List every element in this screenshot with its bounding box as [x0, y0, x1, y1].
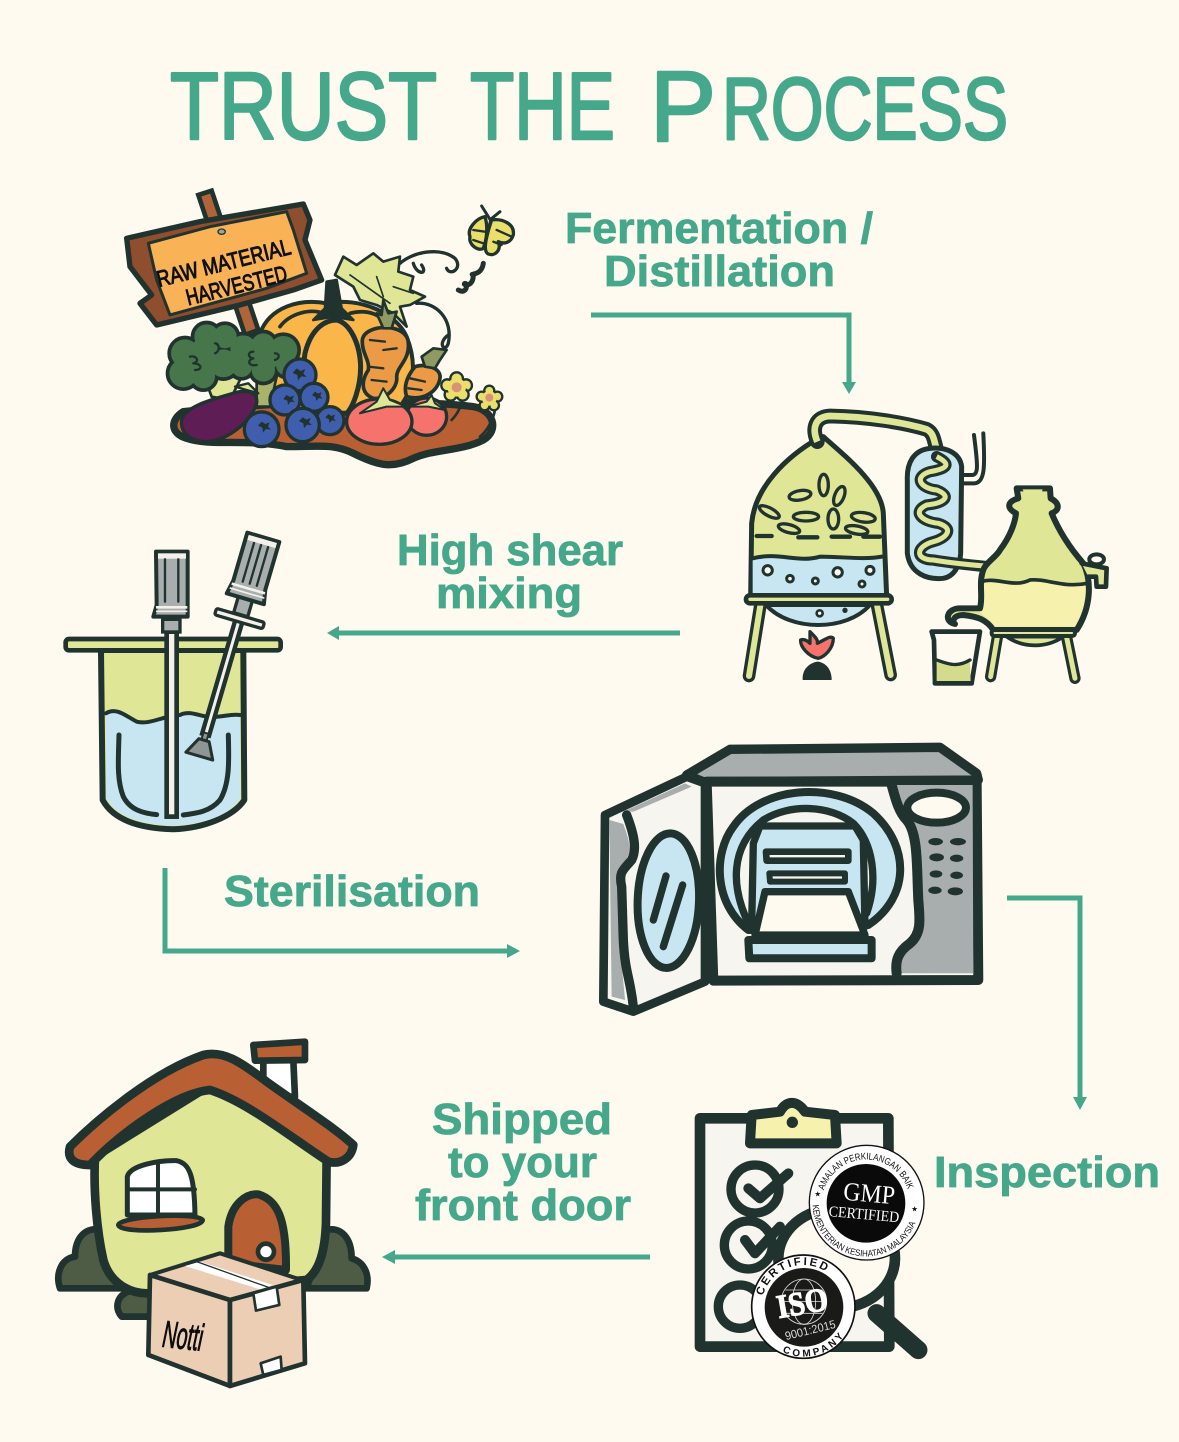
- label: fermentation / distillation: Distillation: [604, 247, 835, 296]
- roof: [69, 1054, 353, 1165]
- butterfly: [469, 206, 513, 255]
- broccoli: [168, 323, 299, 407]
- ground: [174, 402, 493, 465]
- door: [228, 1194, 286, 1270]
- illustration: distillation apparatus: [746, 416, 1107, 683]
- badge: GMP: GMP: [842, 1177, 896, 1210]
- checks: [718, 1165, 788, 1328]
- badge: GMP: ★: [814, 1190, 821, 1199]
- title: P: [650, 51, 716, 163]
- label: high shear mixing: mixing: [436, 569, 582, 618]
- sign face: [148, 212, 307, 315]
- eggplant: [182, 383, 258, 442]
- carrots: [362, 300, 447, 398]
- badge: ISO: 9001:2015: [784, 1318, 837, 1343]
- angled mixer: [175, 530, 287, 763]
- label: high shear mixing: [397, 526, 623, 618]
- label: high shear mixing: High shear: [397, 526, 623, 575]
- pumpkin: [256, 280, 413, 413]
- chamber ring: [720, 792, 900, 930]
- vertical mixer: [153, 552, 188, 817]
- top panel: [687, 747, 978, 782]
- still neck and pipe: [815, 416, 938, 455]
- curl: [458, 263, 483, 291]
- flowers: [441, 372, 502, 437]
- badge: ISO: COMPANY: [784, 1332, 842, 1357]
- condenser: [907, 433, 993, 579]
- magnifier: [778, 1208, 918, 1350]
- badge: GMP: ★: [911, 1205, 918, 1214]
- illustration: clipboard with badges: [694, 1098, 928, 1360]
- still legs: [749, 603, 891, 676]
- post: [198, 191, 258, 335]
- label: sterilisation: Sterilisation: [224, 867, 480, 916]
- badge: GMP: KEMENTERIAN KESIHATAN MALAYSIA: [812, 1205, 916, 1256]
- tomatoes: [347, 388, 447, 444]
- badge: ISO: CERTIFIED: [756, 1257, 828, 1294]
- badge: ISO: [750, 1254, 856, 1360]
- control panel: [892, 785, 973, 973]
- illustration: house and parcel: [58, 1042, 367, 1386]
- badge: ISO: ISO: [774, 1281, 831, 1326]
- sign board: [127, 204, 322, 325]
- title: [170, 51, 1008, 163]
- still body: [751, 437, 887, 597]
- board: [700, 1118, 889, 1347]
- receiving flask: [948, 488, 1107, 678]
- leaves: [758, 474, 876, 536]
- title: TRUST: [170, 53, 437, 160]
- arrow: raw material to distillation: [591, 315, 856, 394]
- label: fermentation / distillation: [565, 204, 873, 296]
- rim: [66, 639, 281, 650]
- badge: GMP: AMALAN PERKILANGAN BAIK: [818, 1152, 914, 1190]
- illustration: high shear mixer: [66, 530, 287, 829]
- clip: [750, 1103, 837, 1143]
- walls: [95, 1083, 327, 1293]
- arrow: sterilisation to inspection: [1007, 898, 1087, 1110]
- flask stand: [1007, 637, 1063, 645]
- beaker: [932, 632, 980, 683]
- door: [603, 777, 705, 1012]
- badge: GMP: CERTIFIED: [828, 1203, 900, 1226]
- parcel brand: Notti: [161, 1314, 206, 1360]
- label: shipped to your front door: Shipped: [432, 1095, 612, 1144]
- arrow: mixing to sterilisation: [165, 868, 520, 958]
- label: shipped to your front door: front door: [415, 1181, 631, 1230]
- burner flame: [801, 632, 833, 680]
- still base: [766, 605, 870, 625]
- cabinet: [707, 782, 978, 981]
- sign text: HARVESTED: [183, 260, 290, 310]
- vines: [400, 252, 458, 348]
- illustration: raw material harvested: [127, 191, 513, 465]
- trays: [752, 826, 865, 927]
- parcel: [148, 1253, 305, 1386]
- illustration: autoclave: [603, 747, 978, 1012]
- badge: GMP: [808, 1144, 925, 1261]
- label: inspection: Inspection: [934, 1148, 1160, 1197]
- chimney: [253, 1042, 305, 1097]
- arrow: distillation to mixing: [327, 626, 680, 640]
- sign text: [154, 233, 299, 316]
- label: shipped to your front door: to your: [448, 1138, 597, 1187]
- bushes: [58, 1229, 367, 1317]
- blueberries: [244, 359, 344, 447]
- tank liquid and wall: [101, 650, 244, 829]
- sign text: RAW MATERIAL: [154, 233, 293, 292]
- label: fermentation / distillation: Fermentation /: [565, 204, 873, 253]
- label: shipped to your front door: [415, 1095, 631, 1230]
- title: THE: [470, 53, 615, 160]
- arrow: inspection to shipped: [382, 1250, 650, 1264]
- window: [118, 1161, 203, 1230]
- title: ROCESS: [722, 59, 1008, 158]
- leaf: [335, 253, 425, 327]
- bubbles: [763, 566, 874, 587]
